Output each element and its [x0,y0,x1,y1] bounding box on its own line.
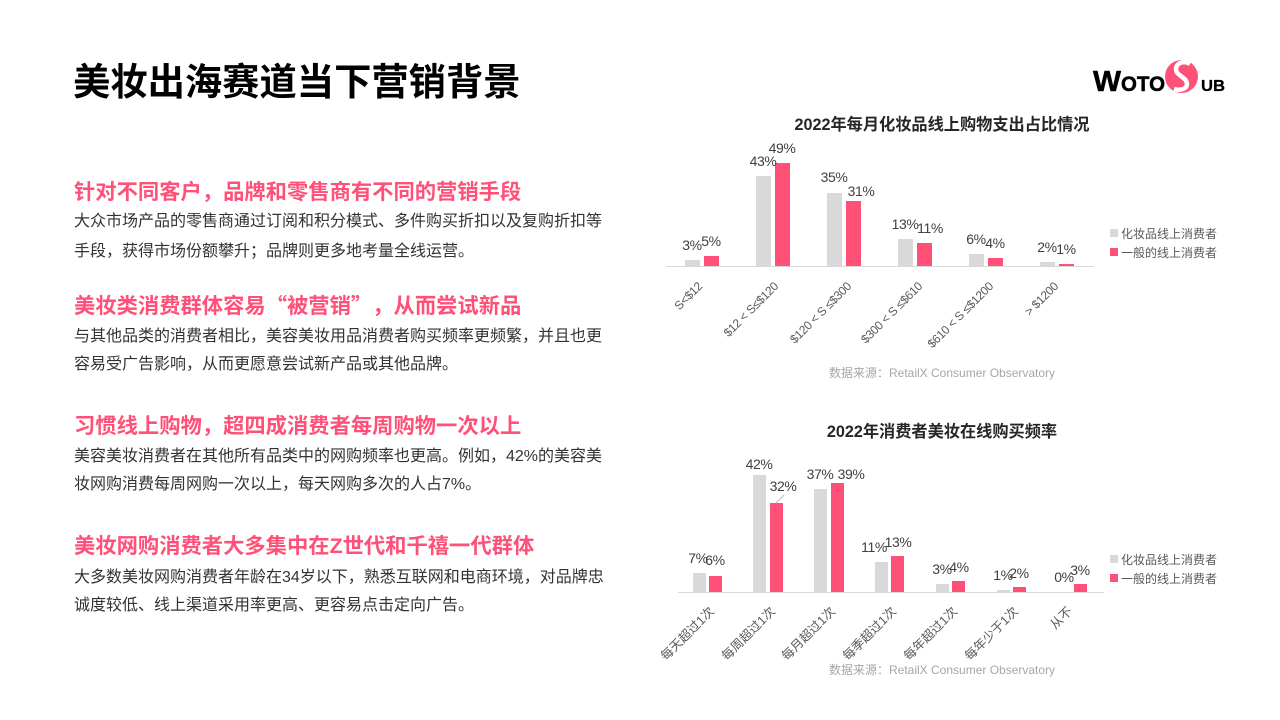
value labels [688,456,1090,585]
value labels: 5% [701,233,721,249]
legend [1110,227,1217,260]
category labels: $610 < S ≤$1200 [925,279,997,351]
legend: 化妆品线上消费者 [1121,553,1217,567]
bars: general online consumers [704,163,1074,266]
text block: online shopping habit [74,414,602,493]
text block: gen Z and millennials [74,534,604,614]
value labels: 37% [807,466,833,482]
value labels: 4% [985,235,1005,251]
value labels: 2% [1037,239,1057,255]
chart: online purchase frequency [657,422,1217,677]
axis line [678,592,1104,594]
value labels: 13% [892,216,918,232]
value labels: 42% [746,456,772,472]
body text: different marketing approaches: 大众市场产品的零售商通过订阅和积分模式、多件购买折扣以及复购折扣等手段，获得市场份额攀升；品牌则更多地考量全线运营。 [74,213,602,260]
heading: different marketing approaches: 针对不同客户，品牌和零售商有不同的营销手段 [74,180,521,204]
bars: cosmetics online consumers [685,176,1055,266]
value labels: 4% [949,559,969,575]
value labels: 1% [993,567,1013,583]
value labels: 6% [705,552,725,568]
text block: different marketing approaches [74,180,602,260]
heading: easily marketed: 美妆类消费群体容易“被营销”，从而尝试新品 [74,289,521,320]
source note: 数据来源：RetailX Consumer Observatory [829,662,1055,677]
category labels: 从不 [1048,604,1075,632]
value labels: 1% [1056,241,1076,257]
value labels: 43% [750,153,776,169]
logo: WotoHub: UB [1201,78,1225,95]
bars: cosmetics online consumers [693,475,1010,592]
value labels: 31% [848,183,874,199]
category labels: $300 < S ≤$610 [858,279,926,346]
category labels [672,279,1062,351]
logo: WotoHub: W [1093,66,1122,98]
category labels: 每周超过1次 [718,604,778,663]
value labels: 3% [682,237,702,253]
value labels: 3% [1070,562,1090,578]
category labels [657,604,1075,663]
body text: easily marketed: 与其他品类的消费者相比，美容美妆用品消费者购买频率更频繁，并且也更容易受广告影响，从而更愿意尝试新产品或其他品牌。 [74,328,602,373]
value labels: 49% [769,140,795,156]
heading: gen Z and millennials: 美妆网购消费者大多集中在Z世代和千禧一代群体 [74,534,534,558]
category labels: 每天超过1次 [657,604,717,663]
body text: gen Z and millennials: 大多数美妆网购消费者年龄在34岁以下，熟悉互联网和电商环境，对品牌忠诚度较低、线上渠道采用率更高、更容易点击定向广告。 [74,569,604,614]
category labels: 每季超过1次 [839,604,899,663]
title: 美妆出海赛道当下营销背景 [73,61,521,103]
category labels: $120 < S ≤$300 [787,279,855,346]
value labels: 13% [885,534,911,550]
value labels: 11% [917,220,943,236]
value labels: 3% [932,561,952,577]
bars: general online consumers [709,483,1087,592]
value labels: 2% [1009,565,1029,581]
category labels: > $1200 [1022,279,1062,319]
body text: online shopping habit: 美容美妆消费者在其他所有品类中的网购频率也更高。例如，42%的美容美妆网购消费每周网购一次以上，每天网购多次的人占7%。 [74,448,602,493]
axis line [666,266,1094,268]
value labels: 32% [770,478,796,494]
value labels: 39% [838,466,864,482]
legend [1110,553,1217,586]
source note: 数据来源：RetailX Consumer Observatory [829,365,1055,380]
value labels: 11% [861,539,887,555]
legend: 一般的线上消费者 [1121,245,1217,260]
heading: online shopping habit: 习惯线上购物，超四成消费者每周购物一次以上 [74,414,521,438]
value labels [682,140,1076,257]
logo: WotoHub: OTO [1121,73,1165,96]
category labels: $12 < S≤$120 [721,279,782,340]
category labels: 每月超过1次 [778,604,838,663]
category labels: 每年超过1次 [900,604,960,663]
value labels: 35% [821,169,847,185]
category labels: S<$12 [672,279,706,313]
chart: monthly cosmetics online spending [666,115,1217,380]
text block: easily marketed [74,289,602,373]
legend: 一般的线上消费者 [1121,571,1217,586]
logo: WotoHub [1093,60,1225,98]
chart title: 2022年每月化妆品线上购物支出占比情况 [794,115,1090,134]
value labels: 7% [688,550,708,566]
chart title: 2022年消费者美妆在线购买频率 [827,422,1057,441]
value labels: 0% [1054,569,1074,585]
category labels: 每年少于1次 [961,604,1021,663]
value labels: 6% [966,231,986,247]
leader line [776,495,784,503]
legend: 化妆品线上消费者 [1121,227,1217,241]
